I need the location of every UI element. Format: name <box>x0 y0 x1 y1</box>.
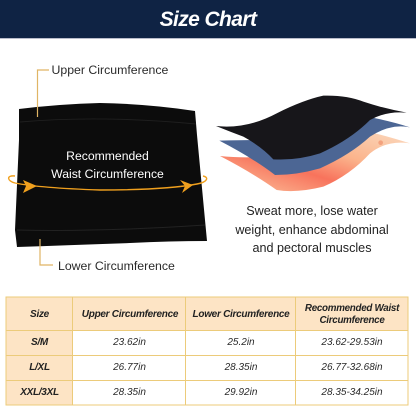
size table: S/M <box>31 337 48 348</box>
size table: L/XL <box>29 362 50 373</box>
blue layer <box>219 117 410 175</box>
label: recommended waist circumference: Waist Circumference <box>51 166 164 180</box>
table header cells <box>30 303 400 326</box>
size table: XXL/3XL <box>20 387 59 398</box>
header banner <box>0 0 416 39</box>
fabric layers illustration <box>216 96 410 192</box>
size table: 23.62-29.53in <box>321 337 383 348</box>
lower leader line <box>40 239 53 265</box>
waist arrow <box>9 176 207 193</box>
size table: 28.35in <box>225 362 257 373</box>
garment body <box>15 103 207 247</box>
fabric description <box>235 204 389 255</box>
size table: 26.77in <box>113 362 146 373</box>
row L/XL <box>29 362 383 373</box>
row S/M <box>31 337 383 348</box>
size table: 29.92in <box>225 387 257 398</box>
size table: Upper Circumference <box>82 309 178 320</box>
size table: Size <box>30 309 49 320</box>
label: upper circumference: Upper Circumference <box>52 63 168 77</box>
title: Size Chart <box>160 8 256 31</box>
size table: 23.62in <box>113 337 146 348</box>
label: recommended waist circumference <box>51 149 164 180</box>
size table: Recommended Waist <box>305 303 399 314</box>
row XXL/3XL <box>20 387 383 398</box>
label: recommended waist circumference: Recommended <box>66 149 149 163</box>
size table: 28.35-34.25in <box>321 387 383 398</box>
fabric description: weight, enhance abdominal <box>235 222 389 236</box>
size table: Circumference <box>320 315 384 326</box>
size table: Lower Circumference <box>193 309 289 320</box>
fabric description: Sweat more, lose water <box>246 204 378 218</box>
size table: 26.77-32.68in <box>321 362 383 373</box>
size table: 28.35in <box>113 387 146 398</box>
fabric description: and pectoral muscles <box>252 241 372 255</box>
label: lower circumference: Lower Circumference <box>58 259 175 273</box>
skin layer <box>220 130 410 191</box>
black layer <box>216 96 407 160</box>
upper leader line <box>38 70 49 117</box>
size table: 25.2in <box>227 337 255 348</box>
